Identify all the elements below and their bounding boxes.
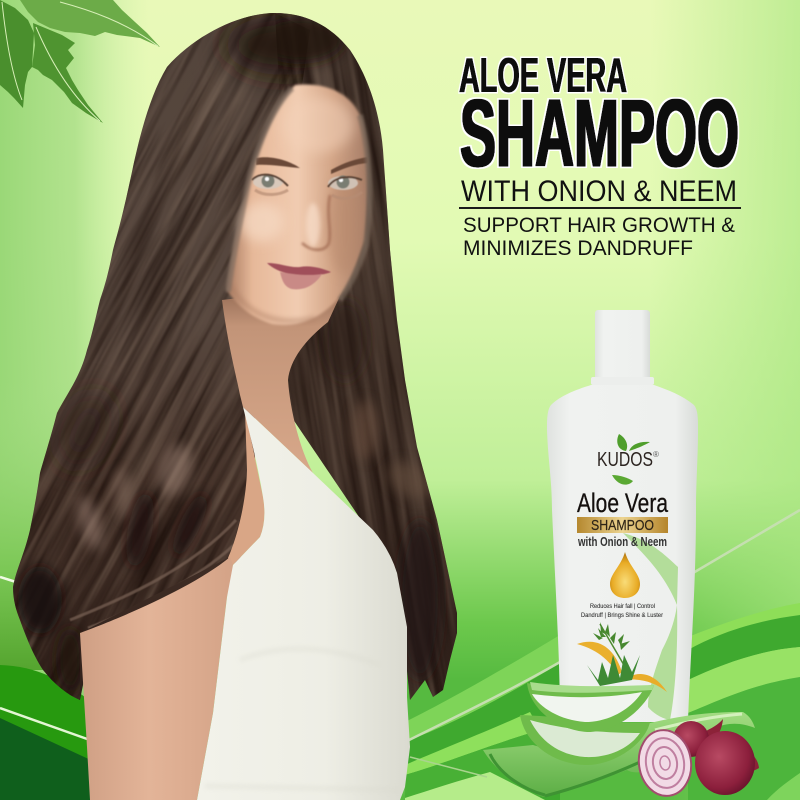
benefit line two: Dandruff | Brings Shine & Luster: [581, 612, 664, 619]
bottle collar: [591, 377, 654, 385]
centre bands: [405, 635, 560, 742]
whole onion: [745, 752, 759, 772]
onions: [635, 719, 759, 799]
front strands by face: [228, 88, 369, 300]
subtitle: with onion and neem: WITH ONION & NEEM: [461, 175, 737, 208]
hair texture right: [255, 16, 442, 680]
aloe slice upper: [527, 682, 654, 732]
leaf veins: [2, 2, 158, 121]
dress shading: [205, 649, 403, 790]
tagline line two: MINIMIZES DANDRUFF: [463, 237, 693, 260]
band label: SHAMPOO: [591, 517, 654, 534]
green swoosh bands: [0, 510, 800, 800]
brand name: KUDOS: [597, 449, 653, 471]
product name: Aloe Vera: [577, 488, 669, 518]
woman with long hair: [13, 13, 457, 800]
icon: neem leaves: [0, 0, 160, 123]
small leaf: [612, 475, 633, 485]
hair texture left: [18, 15, 345, 692]
eyes: [252, 174, 362, 198]
face: [227, 84, 368, 325]
aloe slice lower: [520, 715, 650, 765]
arm: [80, 557, 233, 800]
benefit line one: Reduces Hair fall | Control: [590, 603, 655, 610]
right bands: [688, 603, 800, 650]
product variant: with Onion & Neem: [577, 534, 667, 549]
side chest: [228, 410, 264, 565]
registered mark: ®: [653, 450, 659, 459]
nose: [302, 195, 330, 250]
bottle cap: [595, 310, 650, 378]
neck and chest: [222, 285, 345, 473]
tagline line one: SUPPORT HAIR GROWTH &: [463, 214, 735, 237]
left bands: [0, 665, 95, 800]
white dress: [197, 407, 410, 800]
leaf one: [20, 0, 160, 47]
gold band: [577, 517, 668, 533]
title block: [459, 49, 741, 260]
leaf two: [32, 23, 103, 123]
long aloe leaf: [483, 712, 755, 797]
cut onion: [635, 727, 695, 799]
divider rule: [459, 207, 741, 209]
bottle body: [547, 385, 698, 722]
shampoo bottle: [547, 310, 698, 722]
title: aloe vera: ALOE VERA: [459, 49, 627, 103]
neem sprig and oil splash: [577, 622, 667, 692]
hair silhouette right: [275, 13, 457, 700]
hair silhouette left: [13, 13, 310, 700]
leaf three: [0, 0, 34, 108]
back onion: [702, 719, 723, 748]
brand leaf logo: [617, 434, 650, 451]
lips: [267, 263, 331, 289]
sheer green leaf: [623, 533, 678, 720]
eyebrows: [256, 157, 368, 174]
oil drop: [610, 552, 640, 598]
